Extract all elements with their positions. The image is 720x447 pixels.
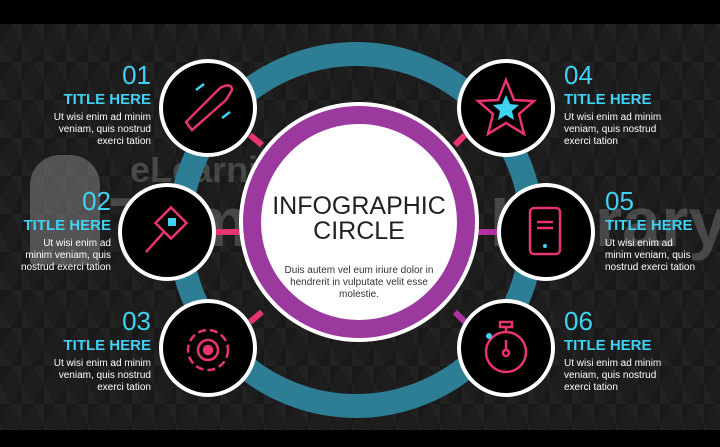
- icon: stopwatch: [486, 322, 526, 372]
- icon circles: [120, 61, 593, 395]
- item 01: TITLE HERE: [63, 91, 151, 108]
- icon: star: [478, 80, 534, 134]
- item 05: [605, 186, 695, 273]
- item 03: TITLE HERE: [63, 337, 151, 354]
- item 05: TITLE HERE: [605, 217, 693, 234]
- item 04: TITLE HERE: [564, 91, 652, 108]
- center text: Duis autem vel eum iriure dolor in hendrerit in vulputate velit esse molestie.: [285, 265, 433, 300]
- watermark: [30, 149, 720, 265]
- item 04: veniam, quis nostrud: [564, 124, 656, 135]
- item 02: minim veniam, quis: [25, 250, 111, 261]
- silhouettes: [30, 155, 100, 265]
- item 02: TITLE HERE: [23, 217, 111, 234]
- icon: tablet: [530, 208, 560, 254]
- item 01: [54, 60, 151, 147]
- watermark: eLearning: [130, 149, 302, 190]
- item 03: Ut wisi enim ad minim: [54, 358, 151, 369]
- item 04: Ut wisi enim ad minim: [564, 112, 661, 123]
- center title: INFOGRAPHIC: [272, 192, 446, 220]
- item 03: [54, 306, 151, 393]
- item 05: Ut wisi enim ad: [605, 238, 673, 249]
- item 01: veniam, quis nostrud: [59, 124, 151, 135]
- item 02: Ut wisi enim ad: [43, 238, 111, 249]
- item 04: exerci tation: [564, 136, 618, 147]
- teal ring: [180, 54, 532, 406]
- item 02: [21, 186, 111, 273]
- item 03: veniam, quis nostrud: [59, 370, 151, 381]
- item 04: 04: [564, 60, 593, 90]
- item 06: 06: [564, 306, 593, 336]
- item 05: nostrud exerci tation: [605, 262, 695, 273]
- item 05: 05: [605, 186, 634, 216]
- connectors: [215, 135, 498, 322]
- item 06: TITLE HERE: [564, 337, 652, 354]
- item 04: [564, 60, 661, 147]
- item 05: minim veniam, quis: [605, 250, 691, 261]
- item 01: 01: [122, 60, 151, 90]
- center title: [272, 192, 446, 245]
- purple ring with center: [239, 102, 479, 342]
- center title: CIRCLE: [313, 217, 405, 245]
- item 06: Ut wisi enim ad minim: [564, 358, 661, 369]
- item 06: exerci tation: [564, 382, 618, 393]
- item 02: nostrud exerci tation: [21, 262, 111, 273]
- item 03: exerci tation: [97, 382, 151, 393]
- icon: gear: [188, 330, 228, 370]
- item 06: veniam, quis nostrud: [564, 370, 656, 381]
- item 02: 02: [82, 186, 111, 216]
- watermark: Templates Library: [110, 183, 720, 261]
- item 06: [564, 306, 661, 393]
- item 03: 03: [122, 306, 151, 336]
- icon: key: [146, 207, 187, 252]
- item 01: Ut wisi enim ad minim: [54, 112, 151, 123]
- icon: rocket: [186, 84, 232, 130]
- item 01: exerci tation: [97, 136, 151, 147]
